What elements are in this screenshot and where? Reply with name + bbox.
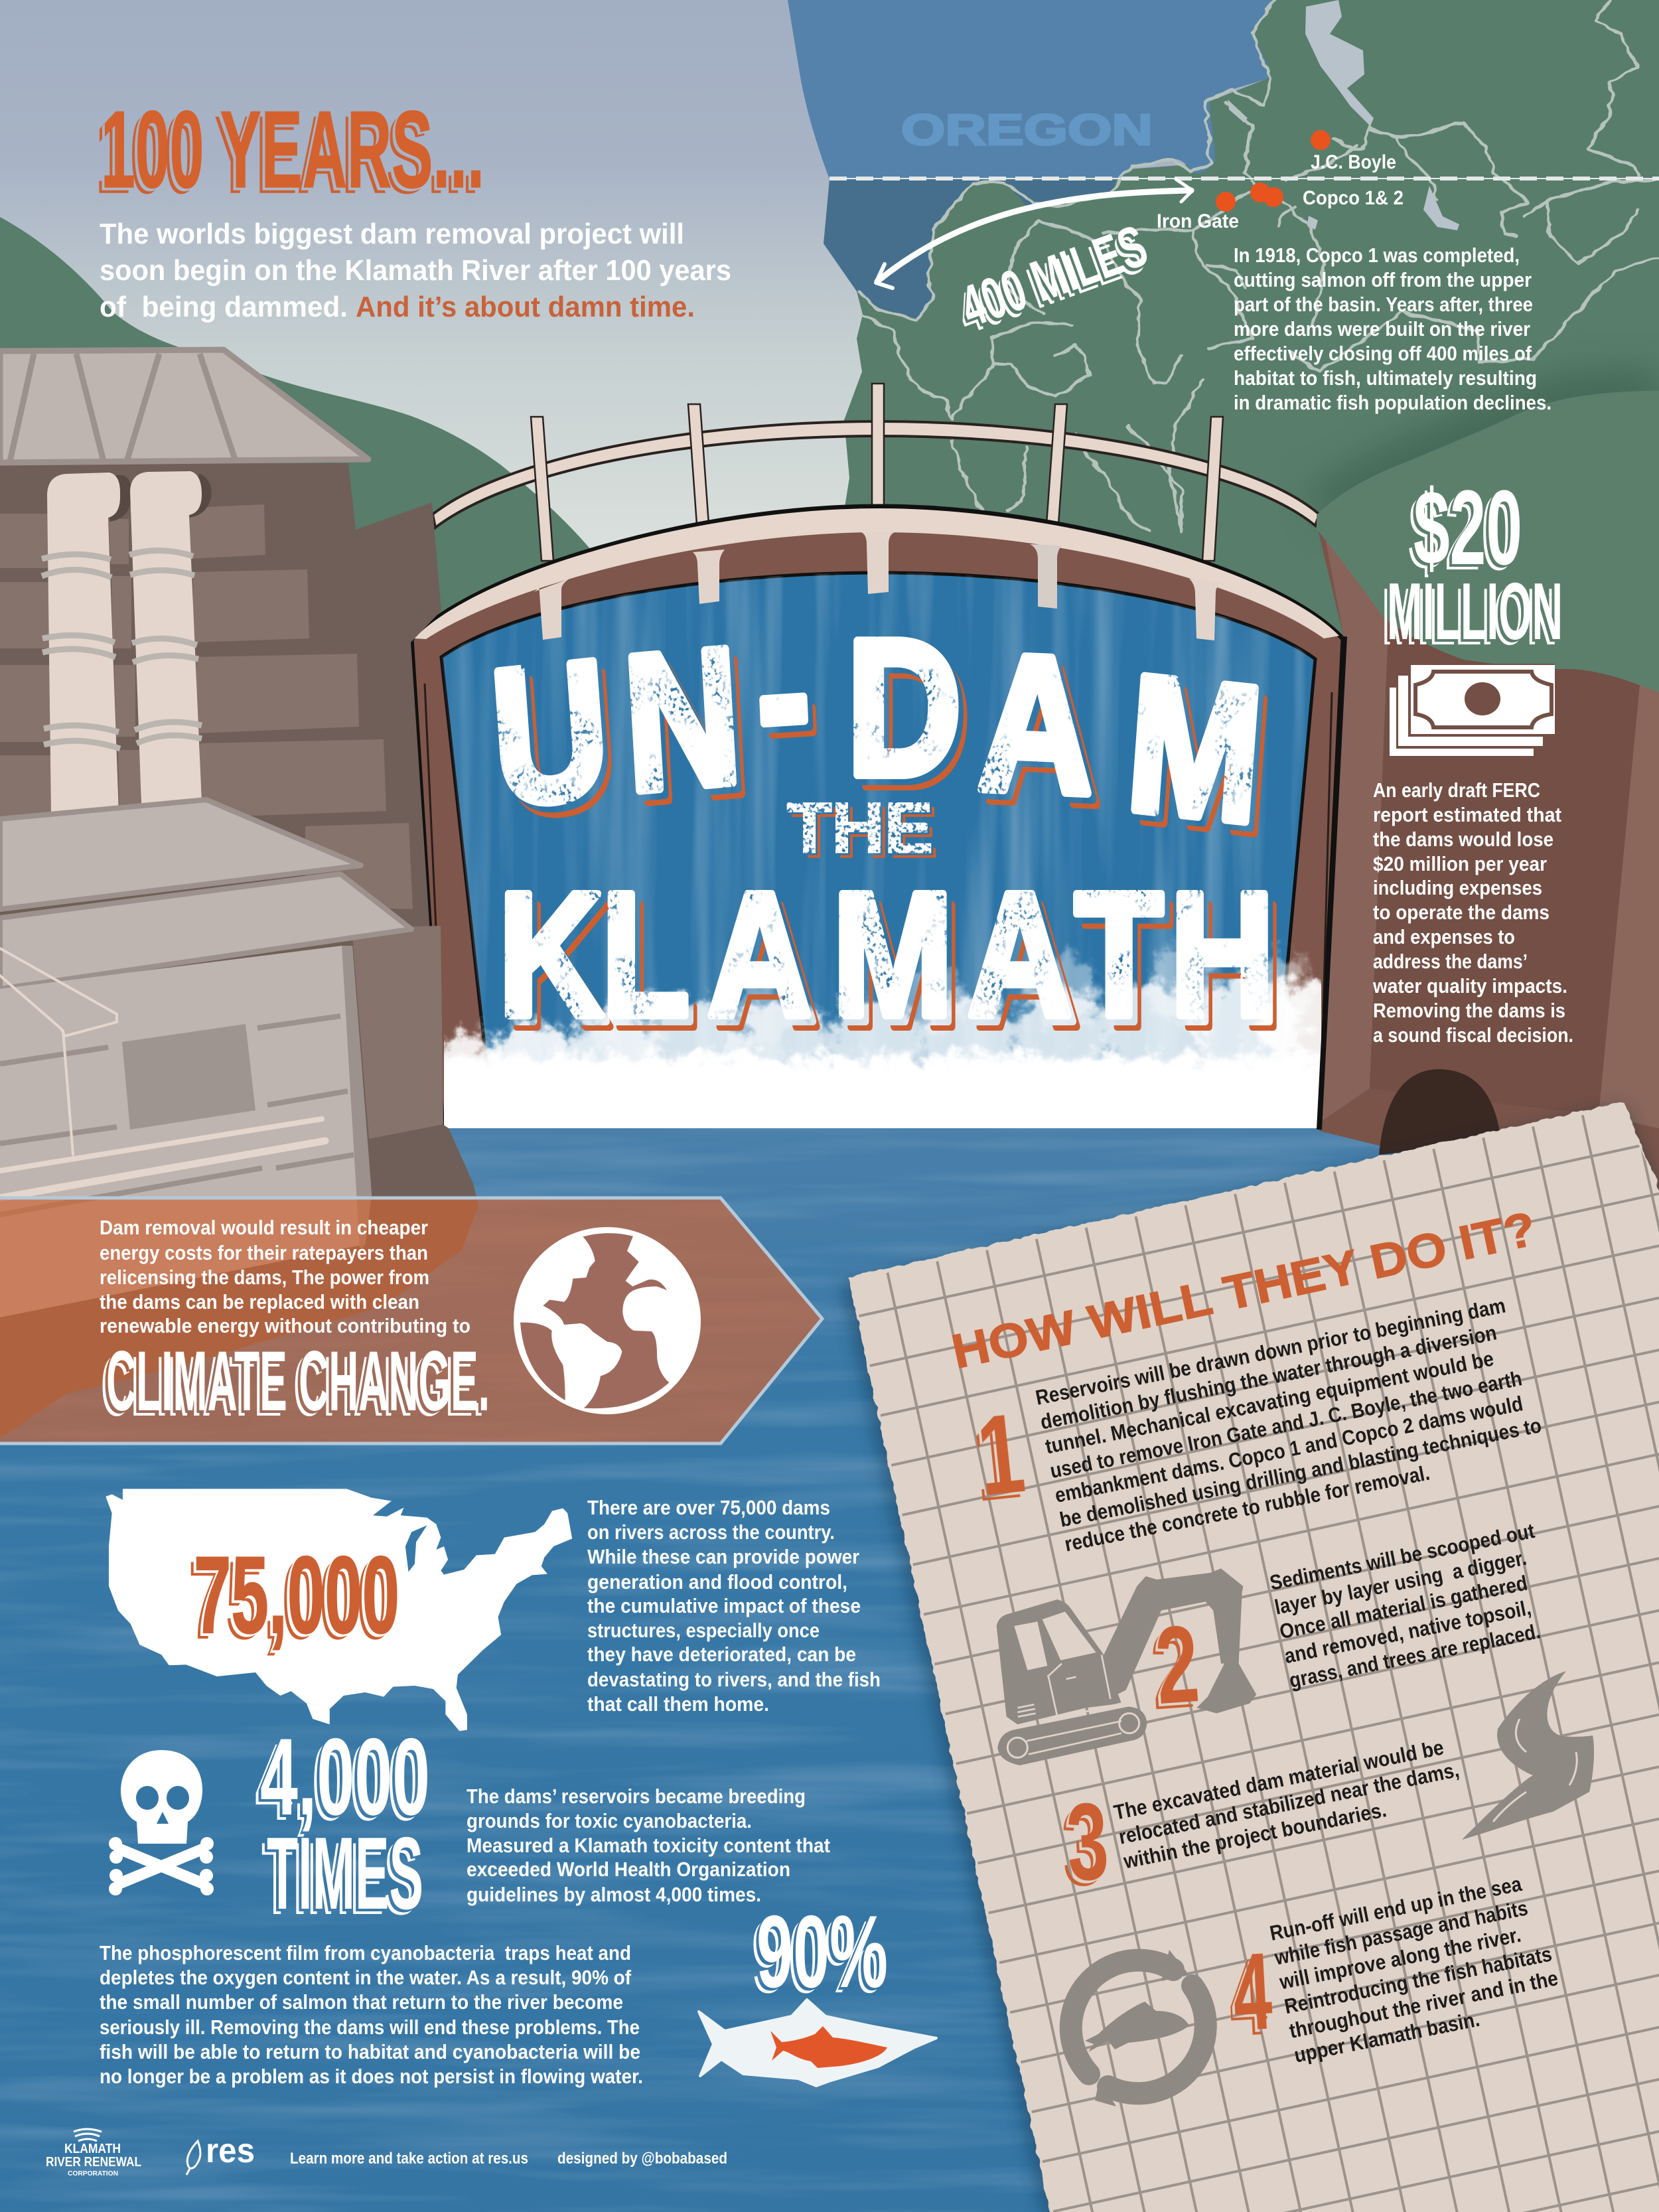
text block: 75,000 dams bbox=[587, 1496, 881, 1716]
building: retaining wall land bbox=[0, 463, 478, 1438]
step 4 text: while fish passage and habits bbox=[1272, 1895, 1530, 1970]
building: pipes bbox=[42, 471, 212, 815]
logo: res bbox=[186, 2132, 255, 2175]
map: California ocean area bbox=[824, 179, 1116, 319]
right cliff shade bbox=[1319, 391, 1659, 508]
big stat: $20 million bbox=[1387, 468, 1563, 656]
panel: climate change arrow banner: CLIMATE CHANGE. bbox=[106, 1334, 490, 1429]
rail: curved handrail bbox=[433, 421, 1319, 528]
intro paragraph: soon begin on the Klamath River after 100 years bbox=[100, 254, 731, 287]
step 2 text: Once all material is gathered bbox=[1277, 1571, 1530, 1643]
paper heading: HOW WILL THEY DO IT? bbox=[948, 1202, 1540, 1379]
step 4 text bbox=[1267, 1868, 1565, 2067]
map: 400 miles label: 400 MILES bbox=[952, 212, 1155, 340]
text block: 75,000 dams: on rivers across the country. bbox=[587, 1520, 835, 1544]
text block: 1918 history: cutting salmon off from the upper bbox=[1234, 268, 1532, 291]
step 1 text: be demolished using drilling and blasting techniques to bbox=[1058, 1413, 1544, 1532]
dam: falling water bbox=[425, 564, 1327, 1082]
background: sky bbox=[0, 0, 1659, 1161]
banner paragraph: renewable energy without contributing to bbox=[100, 1314, 470, 1337]
panel: climate change arrow banner bbox=[0, 1198, 822, 1443]
icon: skull and crossbones bbox=[109, 1750, 214, 1895]
step 2 text: Sediments will be scooped out bbox=[1267, 1518, 1537, 1595]
cliff: tunnel bbox=[1379, 1069, 1501, 1155]
step 1 text: used to remove Iron Gate and J. C. Boyle, the two earth bbox=[1048, 1366, 1524, 1483]
text block: phosphorescent film: depletes the oxygen content in the water. As a result, 90% of bbox=[100, 1966, 632, 1989]
map: dam labels: Copco 1& 2 bbox=[1303, 187, 1404, 209]
step 3 text: relocated and stabilized near the dams, bbox=[1117, 1757, 1461, 1849]
rail: posts bbox=[531, 384, 1223, 561]
text block: 75,000 dams: structures, especially once bbox=[587, 1619, 820, 1642]
text block: 75,000 dams: While these can provide power bbox=[587, 1545, 859, 1568]
text block: 75,000 dams: devastating to rivers, and the fish bbox=[587, 1668, 881, 1691]
text block: cyanobacteria: Measured a Klamath toxicity content that bbox=[467, 1834, 830, 1857]
text block: 1918 history: part of the basin. Years after, three bbox=[1234, 293, 1533, 316]
text block: FERC report: $20 million per year bbox=[1373, 852, 1547, 875]
panel: how will they do it, grid paper bbox=[843, 1102, 1659, 2212]
text block: FERC report: the dams would lose bbox=[1373, 828, 1553, 851]
building: top roof bbox=[0, 350, 368, 463]
text block: FERC report: to operate the dams bbox=[1373, 901, 1550, 924]
text block: 1918 history: effectively closing off 400 miles of bbox=[1234, 342, 1532, 365]
title: Un-Dam the Klamath bbox=[485, 583, 1275, 1053]
banner paragraph: relicensing the dams, The power from bbox=[100, 1266, 429, 1289]
footer designer credit: designed by @bobabased bbox=[557, 2150, 727, 2168]
step 2 number: 2 bbox=[1152, 1602, 1202, 1727]
map: rivers bbox=[857, 0, 1659, 531]
text block: 75,000 dams: they have deteriorated, can be bbox=[587, 1643, 856, 1666]
right cliff bbox=[1317, 391, 1659, 1195]
map: Oregon label: OREGON bbox=[901, 105, 1153, 154]
text block: 75,000 dams: There are over 75,000 dams bbox=[587, 1496, 830, 1519]
text block: phosphorescent film: fish will be able to return to habitat and cyanobacteria will be bbox=[100, 2040, 640, 2063]
step 3 text: The excavated dam material would be bbox=[1112, 1735, 1446, 1824]
icon: stack of cash bbox=[1390, 664, 1555, 756]
text block: cyanobacteria: exceeded World Health Organization bbox=[467, 1858, 790, 1881]
text block: phosphorescent film: no longer be a problem as it does not persist in flowing water. bbox=[100, 2065, 643, 2088]
text block: 1918 history bbox=[1234, 244, 1551, 414]
step 1 text: embankment dams. Copco 1 and Copco 2 dams would bbox=[1053, 1391, 1525, 1507]
logo: Klamath River Renewal: KLAMATH bbox=[64, 2142, 121, 2156]
title: THE: THE bbox=[787, 788, 933, 867]
intro paragraph: of being dammed. bbox=[100, 291, 348, 323]
step 3 number: 3 bbox=[1064, 1779, 1112, 1903]
logo: Klamath River Renewal: RIVER RENEWAL bbox=[46, 2155, 141, 2170]
title: UN-DAM: UN-DAM bbox=[485, 583, 1269, 863]
text block: 75,000 dams: that call them home. bbox=[587, 1692, 769, 1716]
text block: 1918 history: more dams were built on the river bbox=[1234, 317, 1530, 340]
text block: FERC report: report estimated that bbox=[1373, 803, 1561, 826]
heading: 100 years: 100 YEARS... bbox=[101, 88, 484, 210]
step 1 text: reduce the concrete to rubble for removal. bbox=[1062, 1460, 1431, 1556]
text block: FERC report: a sound fiscal decision. bbox=[1373, 1023, 1573, 1047]
icon: salmon bbox=[699, 2000, 936, 2086]
footer call to action: Learn more and take action at res.us bbox=[290, 2150, 528, 2168]
step 1 number: 1 bbox=[972, 1390, 1030, 1520]
building: wall stones bbox=[0, 504, 443, 1139]
step 1 text: demolition by flushing the water through a diversion bbox=[1039, 1320, 1498, 1434]
step 1 text: tunnel. Mechanical excavating equipment would be bbox=[1043, 1346, 1496, 1458]
step 1 text bbox=[1033, 1291, 1548, 1556]
logo: Klamath River Renewal: CORPORATION bbox=[68, 2170, 118, 2177]
step 3 text bbox=[1111, 1733, 1466, 1874]
icon: river bbox=[1462, 1671, 1594, 1840]
dam: inner arch lines bbox=[425, 684, 1332, 1014]
step 4 text: Reintroducing the fish habitats bbox=[1282, 1942, 1553, 2018]
title: KLAMATH: KLAMATH bbox=[498, 855, 1275, 1053]
text block: 1918 history: in dramatic fish population declines. bbox=[1234, 391, 1551, 414]
text block: FERC report: An early draft FERC bbox=[1373, 778, 1540, 802]
step 4 number: 4 bbox=[1230, 1930, 1275, 2053]
stat: 90%: 90% bbox=[757, 1894, 888, 2009]
intro paragraph bbox=[100, 218, 731, 323]
banner paragraph: the dams can be replaced with clean bbox=[100, 1290, 419, 1313]
step 2 text bbox=[1267, 1518, 1556, 1692]
map: dam labels bbox=[1157, 151, 1404, 232]
text block: 75,000 dams: the cumulative impact of these bbox=[587, 1594, 861, 1617]
building: stair rails bbox=[0, 948, 325, 1198]
text block: cyanobacteria bbox=[467, 1785, 830, 1906]
left dam building bbox=[0, 350, 478, 1438]
dam face: waterfall bbox=[411, 506, 1343, 1130]
text block: cyanobacteria: guidelines by almost 4,000 times. bbox=[467, 1883, 761, 1906]
map of the Klamath basin bbox=[788, 0, 1659, 730]
dam rail and posts bbox=[433, 384, 1319, 561]
dam: brown arch bbox=[411, 506, 1343, 1130]
step 2 text: layer by layer using a digger. bbox=[1273, 1546, 1528, 1619]
step 1 text: Reservoirs will be drawn down prior to beginning dam bbox=[1033, 1293, 1508, 1410]
banner paragraph bbox=[100, 1216, 470, 1337]
text block: phosphorescent film: seriously ill. Removing the dams will end these problems. The bbox=[100, 2016, 640, 2039]
text block: 1918 history: In 1918, Copco 1 was completed, bbox=[1234, 244, 1520, 267]
logo: Klamath River Renewal bbox=[46, 2129, 141, 2177]
stat: 75,000: 75,000 bbox=[194, 1534, 399, 1656]
building: lower roofs bbox=[0, 800, 411, 989]
intro paragraph: And it’s about damn time. bbox=[356, 291, 695, 323]
footer logos and credits bbox=[46, 2129, 727, 2177]
lower water bbox=[0, 1128, 1659, 2212]
banner paragraph: energy costs for their ratepayers than bbox=[100, 1241, 428, 1264]
icon: globe bbox=[514, 1227, 701, 1414]
map: Oregon ocean area bbox=[788, 0, 1275, 179]
step 2 text: grass, and trees are replaced. bbox=[1287, 1619, 1542, 1692]
text block: 1918 history: habitat to fish, ultimately resulting bbox=[1234, 366, 1537, 390]
map: dam labels: Iron Gate bbox=[1157, 210, 1239, 232]
text block: FERC report: including expenses bbox=[1373, 876, 1542, 899]
text block: phosphorescent film: the small number of salmon that return to the river become bbox=[100, 1990, 623, 2014]
stat: 4,000 times: 4,000 bbox=[260, 1716, 430, 1838]
step 4 text: will improve along the river. bbox=[1277, 1923, 1523, 1994]
text block: cyanobacteria: grounds for toxic cyanobacteria. bbox=[467, 1809, 752, 1832]
banner paragraph: Dam removal would result in cheaper bbox=[100, 1216, 428, 1239]
big stat: $20 million: $20 bbox=[1413, 468, 1522, 587]
left green hill bbox=[0, 217, 597, 664]
text block: phosphorescent film: The phosphorescent film from cyanobacteria traps heat and bbox=[100, 1941, 631, 1964]
dam: pink deck bbox=[414, 508, 1339, 639]
text block: FERC report bbox=[1372, 778, 1573, 1047]
step 4 text: Run-off will end up in the sea bbox=[1267, 1872, 1524, 1945]
step 3 text: within the project boundaries. bbox=[1121, 1797, 1388, 1874]
text block: FERC report: and expenses to bbox=[1373, 925, 1515, 948]
icon: excavator bbox=[997, 1568, 1256, 1765]
text block: FERC report: water quality impacts. bbox=[1372, 974, 1567, 997]
map: lakes bbox=[1228, 0, 1459, 230]
dam: support teeth bbox=[534, 532, 1222, 640]
building: powerhouse wall bbox=[0, 946, 372, 1317]
icon: fish cycle bbox=[1071, 1950, 1206, 2106]
text block: FERC report: Removing the dams is bbox=[1373, 999, 1565, 1022]
step 4 text: upper Klamath basin. bbox=[1292, 2007, 1482, 2067]
stat: 4,000 times: TIMES bbox=[267, 1816, 423, 1931]
cliff: green hilltop bbox=[1317, 391, 1659, 692]
text block: cyanobacteria: The dams’ reservoirs became breeding bbox=[467, 1785, 806, 1808]
step 4 text: throughout the river and in the bbox=[1287, 1966, 1560, 2043]
intro paragraph: The worlds biggest dam removal project will bbox=[100, 218, 684, 250]
text block: phosphorescent film bbox=[100, 1941, 643, 2088]
text block: 75,000 dams: generation and flood control, bbox=[587, 1570, 847, 1593]
map: dam labels: J.C. Boyle bbox=[1311, 151, 1396, 173]
map: dam location dots bbox=[1216, 130, 1331, 212]
stat: 4,000 times bbox=[260, 1716, 430, 1931]
text block: FERC report: address the dams’ bbox=[1373, 950, 1528, 973]
logo: res: res bbox=[206, 2132, 255, 2170]
step 2 text: and removed, native topsoil, bbox=[1282, 1595, 1533, 1668]
icon: USA map with 75,000 bbox=[106, 1489, 572, 1731]
arrow: 400 miles span bbox=[876, 179, 1192, 288]
map: state border dashed line bbox=[830, 178, 1659, 179]
fog at base of the falls bbox=[444, 936, 1321, 1128]
map: green land bbox=[844, 0, 1659, 730]
